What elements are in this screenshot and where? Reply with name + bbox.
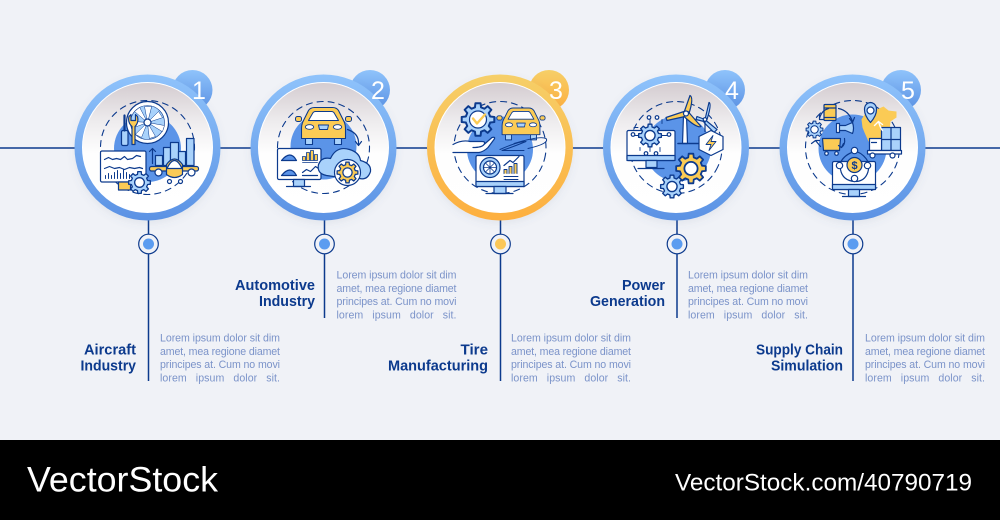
text 4: principes at. Cum no movi — [688, 296, 808, 308]
text 2: principes at. Cum no movi — [336, 296, 456, 308]
heading 5: Simulation — [771, 358, 843, 374]
text 5: Lorem ipsum dolor sit dim — [865, 332, 985, 344]
footer brand: VectorStock — [27, 460, 219, 500]
ring 4 — [603, 74, 749, 220]
heading 4: Power — [622, 278, 665, 294]
footer image id: VectorStock.com/40790719 — [675, 470, 972, 496]
text 5: amet, mea regione diamet — [865, 346, 985, 358]
text 4: Lorem ipsum dolor sit dim — [688, 270, 808, 282]
badge 5 — [881, 70, 921, 110]
text 1: Lorem ipsum dolor sit dim — [160, 332, 280, 344]
step 1: aircraft industry — [74, 70, 280, 384]
footer bar — [0, 440, 1000, 520]
badge 4 — [705, 70, 745, 110]
connector node 2 — [315, 234, 334, 254]
text 1: lorem ipsum dolor sit. — [160, 372, 280, 384]
text 5: lorem ipsum dolor sit. — [865, 372, 985, 384]
number 1: 1 — [192, 77, 206, 105]
heading 4: Generation — [590, 294, 665, 310]
number 3: 3 — [549, 77, 563, 105]
number 4: 4 — [725, 77, 739, 105]
heading 1: Aircraft — [84, 342, 136, 358]
step 2: automotive industry — [235, 70, 457, 322]
text 1: principes at. Cum no movi — [160, 359, 280, 371]
heading 5: Supply Chain — [756, 342, 843, 358]
icon: phone, gear, cart, map, truck and payment monitor — [802, 97, 903, 198]
text 2: Lorem ipsum dolor sit dim — [336, 270, 457, 282]
ring 1 — [74, 74, 220, 220]
number 5: 5 — [901, 77, 915, 105]
number 2: 2 — [371, 77, 385, 105]
connector node 1 — [139, 234, 158, 254]
text 2: amet, mea regione diamet — [336, 283, 457, 295]
heading 2: Industry — [259, 294, 316, 310]
connector node 5 — [843, 234, 863, 254]
step 3: tire manufacturing — [388, 70, 631, 384]
text 4: amet, mea regione diamet — [688, 283, 808, 295]
step 4: power generation — [590, 70, 808, 322]
text 3: Lorem ipsum dolor sit dim — [511, 332, 631, 344]
icon: turbine, tools, monitor, bars and plane — [87, 87, 208, 208]
icon: car, dashboard and cloud gear — [267, 91, 380, 204]
text 3: lorem ipsum dolor sit. — [511, 372, 631, 384]
connector node 3 — [491, 234, 510, 254]
icon: quality gear, car, hand and tire monitor — [447, 94, 553, 201]
ring 5 — [780, 74, 926, 220]
text 2: lorem ipsum dolor sit. — [336, 310, 456, 322]
text 4: lorem ipsum dolor sit. — [688, 310, 808, 322]
text 3: principes at. Cum no movi — [511, 359, 631, 371]
timeline axis — [0, 148, 1000, 381]
connector node 4 — [667, 234, 687, 254]
heading 2: Automotive — [235, 278, 315, 294]
ring 3 — [427, 74, 573, 220]
heading 1: Industry — [80, 358, 137, 374]
heading 3: Tire — [460, 342, 488, 358]
text 3: amet, mea regione diamet — [511, 346, 631, 358]
text 1: amet, mea regione diamet — [160, 346, 280, 358]
icon: monitor, wind turbines, hexagon and gears — [615, 86, 737, 209]
badge 2 — [350, 70, 390, 110]
step 5: supply chain simulation — [756, 70, 985, 384]
text 5: principes at. Cum no movi — [865, 359, 985, 371]
heading 3: Manufacturing — [388, 358, 488, 374]
ring 2 — [250, 74, 396, 220]
badge 1 — [172, 70, 212, 110]
icon: phone, gear, cart, map, truck and payment monitor: $ — [851, 160, 858, 172]
badge 3 — [529, 70, 569, 110]
